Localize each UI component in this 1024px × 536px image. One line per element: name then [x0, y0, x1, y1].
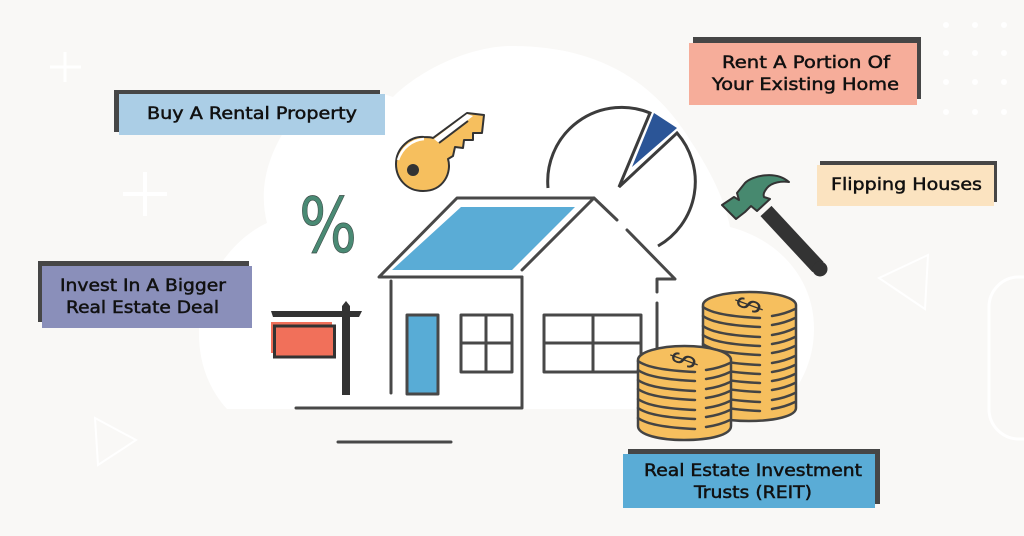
large window [544, 315, 641, 372]
label: rent a portion of your existing home: Rent A Portion Of [722, 53, 891, 73]
icon: percent sign: % [299, 181, 357, 270]
icon: right coin stack: $ [729, 292, 770, 318]
door [407, 315, 438, 394]
icon: key [396, 113, 484, 191]
label: real estate investment trusts: Trusts (REIT) [693, 483, 812, 503]
icon: hammer [722, 175, 828, 276]
small window [461, 315, 512, 372]
house illustration [296, 198, 675, 442]
label: real estate investment trusts: Real Estate Investment [644, 461, 862, 481]
icon: for sale sign [271, 301, 362, 395]
label: flipping houses: Flipping Houses [831, 175, 982, 195]
background decorations [50, 22, 1024, 465]
label: flipping houses [817, 161, 997, 206]
label: rent a portion of your existing home [689, 37, 921, 105]
label: buy a rental property [114, 90, 385, 135]
label: rent a portion of your existing home: Your Existing Home [711, 75, 899, 95]
label: buy a rental property: Buy A Rental Property [147, 104, 357, 124]
label: real estate investment trusts [623, 449, 880, 508]
icon: left coin stack: $ [664, 347, 705, 373]
white cloud backdrop [199, 46, 814, 409]
label: invest in a bigger real estate deal [38, 261, 252, 328]
icon: left coin stack [638, 346, 731, 440]
label: invest in a bigger real estate deal: Invest In A Bigger [60, 276, 226, 296]
icon: right coin stack [703, 292, 796, 421]
roof panel [392, 207, 575, 270]
roof outline [379, 198, 675, 348]
icon: pie chart [548, 107, 695, 246]
label: invest in a bigger real estate deal: Real Estate Deal [66, 298, 219, 318]
walls and ground [296, 277, 522, 442]
